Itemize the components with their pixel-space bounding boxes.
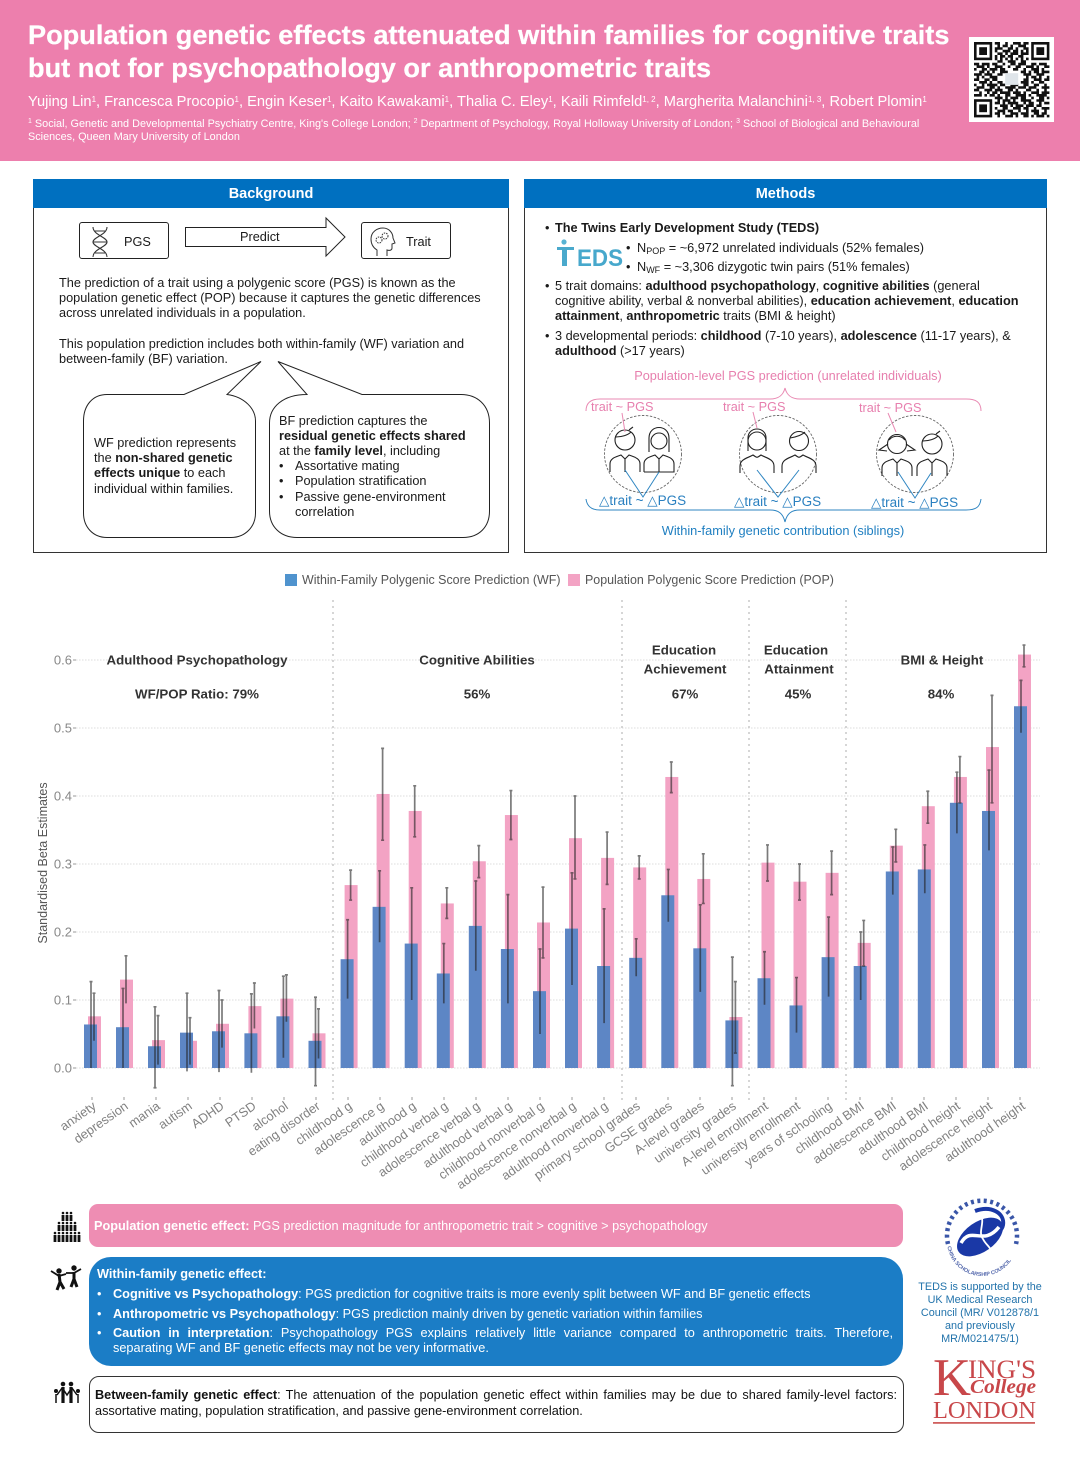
text: developmental periods: adulthood (>17 years) xyxy=(555,343,685,358)
domain headings and WF/POP ratios: Adulthood Psychopathology xyxy=(107,652,288,668)
WF callout text: effects unique to each xyxy=(94,465,225,480)
text: trait domains: attainment, anthropometric traits (BMI & height) xyxy=(555,308,836,323)
x axis labels xyxy=(57,1098,1028,1192)
affiliations: Sciences, Queen Mary University of London xyxy=(28,130,240,142)
y axis: 0.2 xyxy=(54,924,72,940)
text: WF and BF variation: between-family (BF) variation. xyxy=(59,351,228,366)
BF callout text: Assortative mating xyxy=(295,458,400,473)
domain headings and WF/POP ratios xyxy=(107,642,984,702)
text: funding note: MR/M021475/1) xyxy=(941,1333,1019,1345)
logo: China Scholarship Council xyxy=(944,1198,1020,1276)
y axis: 0.5 xyxy=(54,720,72,736)
population effect text: Population genetic effect: PGS prediction magnitude for anthropometric trait > cognitive > psychopathology xyxy=(94,1218,708,1232)
x axis labels: depression xyxy=(71,1098,131,1146)
group separators xyxy=(333,600,846,1100)
domain headings and WF/POP ratios: WF/POP Ratio: 79% xyxy=(135,686,259,702)
x axis labels: adulthood nonverbal g xyxy=(498,1098,611,1183)
text: trait domains xyxy=(545,278,1019,323)
text: trait domains: 5 trait domains: adulthood psychopathology, cognitive abilities (general xyxy=(555,278,980,293)
x axis labels: alcohol xyxy=(249,1098,291,1134)
logo: King's College London: LONDON xyxy=(933,1398,1036,1424)
domain headings and WF/POP ratios: Attainment xyxy=(764,662,834,676)
panel: between-family genetic effect xyxy=(89,1376,904,1433)
domain headings and WF/POP ratios: Achievement xyxy=(644,662,727,676)
text: sample sizes: • xyxy=(626,259,630,274)
y axis: 0.0 xyxy=(54,1060,72,1076)
BF callout text: correlation xyxy=(295,504,354,519)
background heading xyxy=(33,179,509,208)
bullet: anthropometric: • xyxy=(97,1306,101,1320)
BF callout text: at the family level, including xyxy=(279,443,440,458)
x axis labels: mania xyxy=(126,1098,163,1130)
delta labels: △trait ~ △PGS xyxy=(734,494,821,509)
x axis labels: primary school grades xyxy=(531,1098,643,1183)
x axis labels: GCSE grades xyxy=(601,1098,675,1156)
text: WF and BF variation xyxy=(59,336,464,366)
x axis labels: childhood verbal g xyxy=(357,1098,451,1170)
panel: background xyxy=(33,179,509,553)
title xyxy=(28,19,949,83)
trait box: Trait xyxy=(406,234,431,249)
pink pointers xyxy=(622,412,896,432)
logo: King's College London xyxy=(933,1349,1036,1424)
text: POP definition: population genetic effect (POP) because it captures the genetic differences xyxy=(59,290,481,305)
bullet: cognitive: Cognitive vs Psychopathology: PGS prediction for cognitive traits is more evenly split between WF and BF genetic effects xyxy=(113,1286,810,1300)
WF error bars xyxy=(90,680,1022,1088)
chart legend xyxy=(285,573,834,587)
POP bars xyxy=(88,655,1031,1068)
x axis labels: childhood BMI xyxy=(792,1098,867,1157)
circles xyxy=(604,416,954,492)
bullet: caution: Caution in interpretation: Psychopathology PGS explains relatively little variance compared to anthropometric traits. Therefore, xyxy=(113,1324,893,1340)
x axis labels: A-level enrollment xyxy=(678,1098,771,1169)
population label: Population-level PGS prediction (unrelated individuals) xyxy=(634,368,942,383)
text: sample sizes: • xyxy=(626,240,630,254)
x axis labels: A-level grades xyxy=(631,1098,707,1157)
text: POP definition xyxy=(59,275,481,320)
callout: WF prediction xyxy=(83,361,262,538)
bullet marker: caution: • xyxy=(97,1324,101,1340)
x axis labels: childhood nonverbal g xyxy=(436,1098,547,1182)
x axis labels: adolescence nonverbal g xyxy=(454,1098,579,1192)
domain headings and WF/POP ratios: Education xyxy=(652,642,716,658)
delta labels xyxy=(599,493,958,510)
x axis labels: adolescence g xyxy=(311,1098,387,1158)
domain headings and WF/POP ratios: Cognitive Abilities xyxy=(419,652,535,668)
panel: within-family genetic effect xyxy=(89,1257,903,1366)
pink brace xyxy=(586,388,981,411)
text: sample sizes: NPOP = ~6,972 unrelated individuals (52% females) xyxy=(637,240,924,256)
x axis labels: adolescence height xyxy=(896,1098,995,1174)
arrow: predict: Predict xyxy=(240,228,280,244)
diagram: sibling design xyxy=(586,368,982,538)
x axis labels: childhood g xyxy=(292,1098,355,1148)
x axis labels: adulthood g xyxy=(355,1098,419,1149)
icon: crowd xyxy=(54,1212,80,1242)
domain headings and WF/POP ratios: 84% xyxy=(928,686,954,702)
x axis labels: adulthood height xyxy=(942,1098,1028,1165)
WF callout text: individual within families. xyxy=(94,481,233,496)
x axis labels: childhood height xyxy=(878,1098,963,1164)
authors: Yujing Lin1, Francesca Procopio1, Engin Keser1, Kaito Kawakami1, Thalia C. Eley1, Kaili Rimfeld1, 2, Margherita Malanchini1, 3, Robert Plomin1 xyxy=(28,94,927,110)
affiliations: 1 Social, Genetic and Developmental Psychiatry Centre, King's College London; 2 Department of Psychology, Royal Holloway University of London; 3 School of Biological and Behavioural xyxy=(28,118,919,130)
delta labels: △trait ~ △PGS xyxy=(599,493,686,508)
y axis title: Standardised Beta Estimates xyxy=(36,782,50,944)
sibling pair 1 xyxy=(610,427,674,472)
x axis labels: university enrollment xyxy=(698,1098,803,1178)
grid lines xyxy=(76,660,1040,1068)
text: funding note: and previously xyxy=(945,1320,1015,1332)
icon: TEDS logo: EDS xyxy=(577,245,623,272)
text: trait domains: cognitive ability, verbal & nonverbal abilities), education achievement, education xyxy=(555,293,1019,308)
x axis labels: anxiety xyxy=(57,1098,99,1134)
logo: King's College London: College xyxy=(970,1376,1036,1398)
text: developmental periods xyxy=(545,328,1011,358)
icon: family xyxy=(54,1382,80,1403)
QR code xyxy=(969,37,1054,122)
delta labels: △trait ~ △PGS xyxy=(871,495,958,510)
x axis labels: autism xyxy=(155,1098,195,1132)
text: funding note: TEDS is supported by the xyxy=(918,1281,1042,1293)
text: POP definition: across unrelated individuals in a population. xyxy=(59,305,306,320)
domain headings and WF/POP ratios: 56% xyxy=(464,686,490,702)
blue pointers xyxy=(625,470,931,498)
BF callout text: residual genetic effects shared xyxy=(279,428,466,443)
BF callout text xyxy=(279,412,466,519)
within-family heading: Within-family genetic effect: xyxy=(97,1266,266,1280)
between-family text: Between-family genetic effect: The attenuation of the population genetic effect within families may be due to shared family-level factors: xyxy=(95,1387,897,1402)
PGS box xyxy=(79,222,169,259)
trait labels: trait ~ PGS xyxy=(723,400,785,414)
WF bars xyxy=(84,706,1027,1068)
x axis labels: years of schooling xyxy=(742,1098,835,1170)
text: sample sizes xyxy=(626,240,924,275)
trait labels: trait ~ PGS xyxy=(859,401,921,415)
text: trait domains: • xyxy=(545,278,549,293)
PGS box: PGS xyxy=(124,234,151,249)
trait labels: trait ~ PGS xyxy=(591,400,653,414)
y axis: 0.6 xyxy=(54,652,72,668)
domain headings and WF/POP ratios: BMI & Height xyxy=(901,652,984,668)
callout: BF prediction xyxy=(269,361,490,538)
methods heading xyxy=(524,179,1047,208)
between-family text: assortative mating, population stratification, and passive gene-environment correlation. xyxy=(95,1403,583,1418)
trait labels xyxy=(591,400,921,415)
text: TEDS study: • xyxy=(545,220,549,235)
title: but not for psychopathology or anthropometric traits xyxy=(28,52,711,83)
BF callout text: Passive gene-environment xyxy=(295,489,446,504)
icon: DNA xyxy=(92,227,108,257)
domain headings and WF/POP ratios: Education xyxy=(764,642,828,658)
bullet: caution xyxy=(113,1324,893,1355)
bars and error bars xyxy=(84,645,1031,1088)
header banner xyxy=(0,0,1080,161)
chart legend: Population Polygenic Score Prediction (POP) xyxy=(585,573,834,587)
logo: China Scholarship Council: CHINA SCHOLARSHIP COUNCIL xyxy=(948,1246,1011,1276)
WF callout text: the non-shared genetic xyxy=(94,450,233,465)
logo: King's College London: K xyxy=(933,1349,971,1407)
BF callout text: • xyxy=(279,458,283,473)
y axis: 0.3 xyxy=(54,856,72,872)
BF callout text: • xyxy=(279,473,283,488)
methods heading: Methods xyxy=(756,186,815,202)
text: funding note: Council (MR/ V012878/1 xyxy=(921,1307,1039,1319)
text: funding note: UK Medical Research xyxy=(928,1294,1032,1306)
WF callout text xyxy=(94,435,236,496)
text: WF and BF variation: This population prediction includes both within-family (WF) variation and xyxy=(59,336,464,350)
x axis labels: ADHD xyxy=(188,1098,227,1131)
bullet: anthropometric: Anthropometric vs Psychopathology: PGS prediction mainly driven by genetic variation within families xyxy=(113,1306,702,1320)
domain headings and WF/POP ratios: 67% xyxy=(672,686,698,702)
text: developmental periods: • xyxy=(545,328,549,343)
x axis labels: adulthood BMI xyxy=(855,1098,931,1158)
text: TEDS study: The Twins Early Development Study (TEDS) xyxy=(555,220,819,235)
y axis: 0.1 xyxy=(54,992,72,1008)
domain headings and WF/POP ratios: 45% xyxy=(785,686,811,702)
y axis xyxy=(54,652,72,1076)
within-family label: Within-family genetic contribution (siblings) xyxy=(662,523,904,538)
panel: methods xyxy=(524,179,1047,553)
text: sample sizes: NWF = ~3,306 dizygotic twin pairs (51% females) xyxy=(637,259,910,275)
axis ticks xyxy=(73,660,1020,1100)
arrow: predict xyxy=(185,216,346,258)
x axis labels: adolescence BMI xyxy=(810,1098,899,1167)
x axis labels: adulthood verbal g xyxy=(420,1098,515,1171)
y axis: 0.4 xyxy=(54,788,72,804)
bullet: cognitive: • xyxy=(97,1286,101,1300)
title: Population genetic effects attenuated within families for cognitive traits xyxy=(28,19,949,50)
text: funding note xyxy=(918,1281,1042,1345)
WF callout text: WF prediction represents xyxy=(94,435,236,450)
x axis labels: eating disorder xyxy=(245,1098,323,1159)
panel: population genetic effect xyxy=(89,1204,903,1247)
icon: dancing family xyxy=(50,1265,82,1290)
chart legend: Within-Family Polygenic Score Prediction (WF) xyxy=(302,573,560,587)
text: POP definition: The prediction of a trait using a polygenic score (PGS) is known as the xyxy=(59,275,456,290)
between-family text xyxy=(95,1387,897,1418)
sibling pair 3 xyxy=(879,431,947,476)
x axis labels: PTSD xyxy=(222,1098,259,1130)
bullet: caution: separating WF and BF genetic effects may not be very informative. xyxy=(113,1340,489,1355)
icon: TEDS logo xyxy=(557,239,623,272)
icon: head with gears xyxy=(370,228,396,256)
text: developmental periods: 3 developmental periods: childhood (7-10 years), adolescence (11-17 years), & xyxy=(555,328,1011,343)
affiliations xyxy=(28,118,919,142)
logo: King's College London: ING'S xyxy=(968,1355,1036,1384)
x axis labels: adolescence verbal g xyxy=(375,1098,483,1180)
BF callout text: Population stratification xyxy=(295,473,427,488)
BF callout text: • xyxy=(279,489,283,504)
sibling pair 2 xyxy=(740,429,816,473)
blue brace xyxy=(586,499,981,522)
POP error bars xyxy=(92,645,1026,1065)
BF callout text: BF prediction captures the xyxy=(279,412,427,428)
x axis labels: university grades xyxy=(651,1098,739,1166)
background heading: Background xyxy=(229,186,313,202)
trait box xyxy=(361,222,451,259)
